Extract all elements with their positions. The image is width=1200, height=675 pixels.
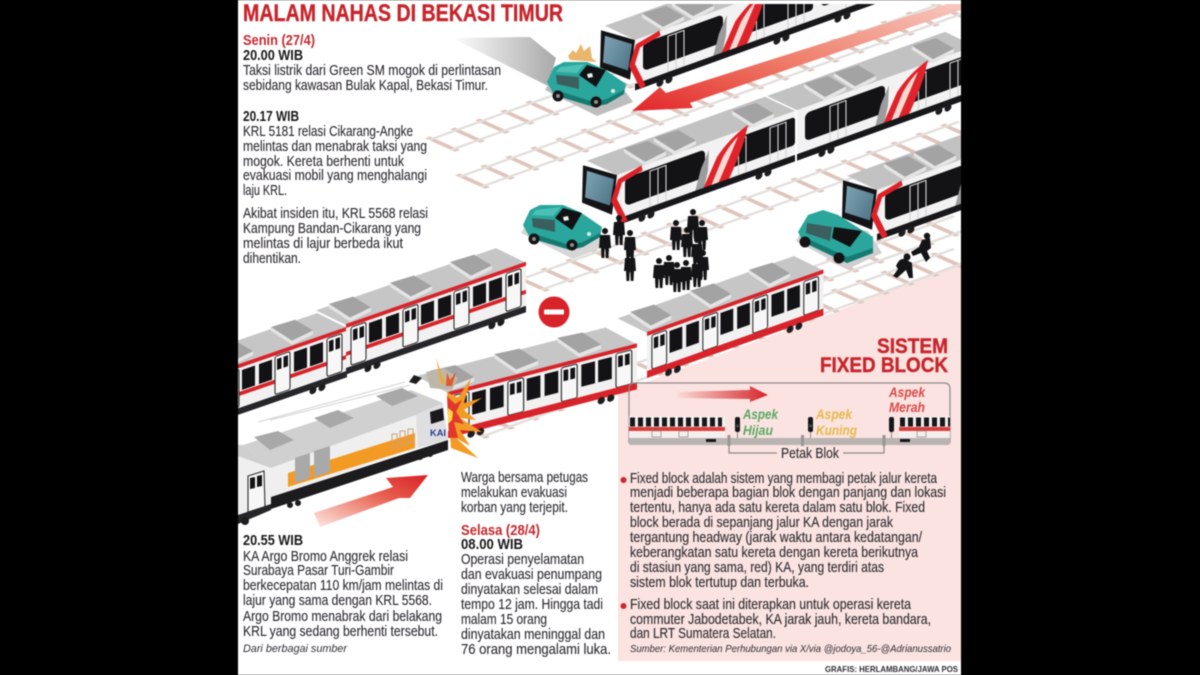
KRL struck train, rear car — [618, 256, 824, 378]
text block: 20.55 WIB: berkecepatan 110 km/jam melintas di — [243, 578, 443, 594]
diagram: fixed block signalling — [629, 383, 950, 462]
text block: 08.00 WIB: 08.00 WIB — [461, 537, 523, 553]
text block: 08.00 WIB: dan evakuasi penumpang — [461, 567, 602, 583]
debris — [409, 358, 458, 390]
label: aspek hijau: Aspek — [742, 407, 779, 422]
track bar — [629, 438, 950, 445]
text block: 20.55 WIB: KA Argo Bromo Anggrek relasi — [243, 549, 408, 565]
signal: yellow — [808, 417, 813, 438]
label: aspek hijau — [742, 407, 779, 438]
taxi 2 — [521, 205, 609, 259]
source note left: Dari berbagai sumber — [243, 643, 348, 655]
source note right: Sumber: Kementerian Perhubungan via X/via @jodoya_56-@Adrianussatrio — [630, 643, 951, 655]
text block: evacuation: korban yang terjepit. — [461, 500, 568, 516]
text block: 08.00 WIB — [461, 523, 611, 658]
label: aspek merah: Aspek — [888, 385, 926, 400]
railway tracks — [429, 0, 981, 437]
crowd of people near train 2 — [599, 209, 709, 292]
label: aspek merah — [888, 385, 926, 415]
red arrow: direction of Argo Bromo — [314, 475, 428, 527]
label: aspek kuning: Kuning — [816, 423, 858, 438]
text block: 08.00 WIB: malam 15 orang — [461, 612, 547, 628]
text block: 20.55 WIB: KRL yang sedang berhenti tersebut. — [243, 624, 438, 640]
heading: sistem fixed block — [820, 335, 948, 377]
main title: MALAM NAHAS DI BEKASI TIMUR — [243, 0, 563, 27]
text block: 20.00 WIB: sebidang kawasan Bulak Kapal, Bekasi Timur. — [243, 78, 488, 94]
label: aspek kuning: Aspek — [815, 407, 853, 422]
text block: KRL 5568 stopped: Kampung Bandan-Cikarang yang — [243, 221, 421, 237]
text block: 08.00 WIB: dinyatakan meninggal dan — [461, 627, 605, 643]
text block: 20.00 WIB: 20.00 WIB — [243, 48, 303, 64]
text block: KRL 5568 stopped: Akibat insiden itu, KRL 5568 relasi — [243, 206, 428, 222]
taxi 3 — [796, 210, 882, 269]
left diagram train — [629, 416, 725, 442]
bullet text: fixed block definition: tergantung headway (jarak waktu antara kedatangan/ — [630, 530, 923, 546]
KRL 5568 stopped train, upper left — [237, 312, 348, 416]
evacuating runners — [893, 233, 931, 278]
signal: green — [735, 417, 740, 438]
coach behind locomotive — [238, 445, 271, 525]
text block: 08.00 WIB: 76 orang mengalami luka. — [461, 642, 611, 658]
diagram arrow — [677, 386, 768, 402]
text block: 20.55 WIB — [243, 533, 443, 640]
text block: 20.55 WIB: 20.55 WIB — [243, 533, 303, 549]
no entry sign — [538, 296, 570, 328]
bullet text: fixed block definition: sistem blok tertutup dan terbuka. — [630, 575, 809, 591]
explosion at collision — [409, 358, 482, 458]
impact spark on first taxi — [568, 44, 597, 62]
text block: KRL 5568 stopped — [243, 206, 428, 267]
bullet text: fixed block definition: menjadi beberapa bagian blok dengan panjang dan lokasi — [630, 485, 946, 501]
text block: 08.00 WIB: tempo 12 jam. Hingga tadi — [461, 597, 603, 613]
text block: 20.17 WIB: evakuasi mobil yang menghalangi — [243, 168, 427, 184]
taxi 1 — [545, 62, 633, 116]
text block: 20.17 WIB: melintas dan menabrak taksi yang — [243, 139, 427, 155]
KA Argo Bromo Anggrek locomotive — [238, 388, 448, 525]
KRL struck train, crushed car — [417, 327, 638, 438]
KRL 5568 second car — [316, 248, 527, 375]
text block: 20.00 WIB — [243, 33, 501, 94]
text block: 20.55 WIB: Surabaya Pasar Turi-Gambir — [243, 563, 394, 579]
top white mask strip — [600, 0, 961, 4]
petak blok bracket — [728, 435, 886, 462]
text block: 08.00 WIB: Operasi penyelamatan — [461, 552, 584, 568]
train 3 — [841, 134, 962, 241]
white infographic page — [238, 0, 961, 675]
bullet text: fixed block definition: keberangkatan satu kereta dengan kereta berikutnya — [630, 545, 919, 561]
heading: sistem fixed block: SISTEM — [877, 335, 948, 358]
bullet text: fixed block definition — [620, 471, 946, 591]
label: aspek kuning — [815, 407, 858, 438]
text block: KRL 5568 stopped: melintas di lajur berbeda ikut — [243, 236, 403, 252]
bullet text: fixed block definition: tertentu, hanya ada satu kereta dalam satu blok. Fixed — [630, 500, 925, 516]
bullet text: fixed block usage: Fixed block saat ini diterapkan untuk operasi kereta — [630, 597, 912, 613]
text block: 20.55 WIB: lajur yang sama dengan KRL 5568. — [243, 593, 432, 609]
shadow wedge behind first taxi — [452, 37, 556, 86]
bullet text: fixed block definition: block berada di sepanjang jalur KA dengan jarak — [630, 515, 894, 531]
graphic credit: GRAFIS: HERLAMBANG/JAWA POS — [825, 664, 958, 674]
text block: 08.00 WIB: Selasa (28/4) — [461, 523, 540, 539]
text block: evacuation — [461, 470, 588, 516]
heading: sistem fixed block: FIXED BLOCK — [820, 354, 948, 377]
illustration: accident scene — [237, 3, 962, 527]
text block: 20.00 WIB: Taksi listrik dari Green SM mogok di perlintasan — [243, 63, 501, 79]
petak blok bracket: Petak Blok — [781, 446, 840, 462]
bullet text: fixed block usage: dan LRT Sumatera Selatan. — [630, 626, 776, 642]
text block: 20.17 WIB: mogok. Kereta berhenti untuk — [243, 154, 405, 170]
text block: evacuation: melakukan evakuasi — [461, 485, 567, 501]
text block: 20.17 WIB: KRL 5181 relasi Cikarang-Angke — [243, 124, 413, 140]
text block: 20.55 WIB: Argo Bromo menabrak dari belakang — [243, 609, 442, 625]
panel: pink fixed block background — [618, 262, 961, 661]
train 1 striking taxi — [599, 3, 876, 91]
text block: KRL 5568 stopped: dihentikan. — [243, 251, 301, 267]
text block: 20.17 WIB: 20.17 WIB — [243, 109, 299, 125]
text block: evacuation: Warga bersama petugas — [461, 470, 588, 486]
bullet text: fixed block definition: di stasiun yang sama, red) KA, yang terdiri atas — [630, 560, 884, 576]
label: aspek merah: Merah — [889, 400, 925, 415]
right diagram train — [899, 416, 950, 442]
text block: 08.00 WIB: dinyatakan selesai dalam — [461, 582, 598, 598]
text block: 20.17 WIB — [243, 109, 427, 199]
bullet text: fixed block usage: commuter Jabodetabek, KA jarak jauh, kereta bandara, — [630, 612, 931, 628]
bullet text: fixed block definition: Fixed block adalah sistem yang membagi petak jalur kereta — [630, 471, 938, 487]
text block: 20.00 WIB: Senin (27/4) — [243, 33, 315, 49]
bullet text: fixed block usage — [620, 597, 931, 642]
signal: red — [889, 417, 894, 438]
train 2 — [581, 32, 962, 224]
label: aspek hijau: Hijau — [743, 423, 774, 438]
text block: 20.17 WIB: laju KRL. — [243, 183, 287, 199]
red arrow: direction of KRL 5181 — [632, 3, 961, 111]
KA Argo Bromo Anggrek locomotive: KAI — [430, 428, 446, 438]
speed lines behind locomotive — [258, 382, 410, 422]
